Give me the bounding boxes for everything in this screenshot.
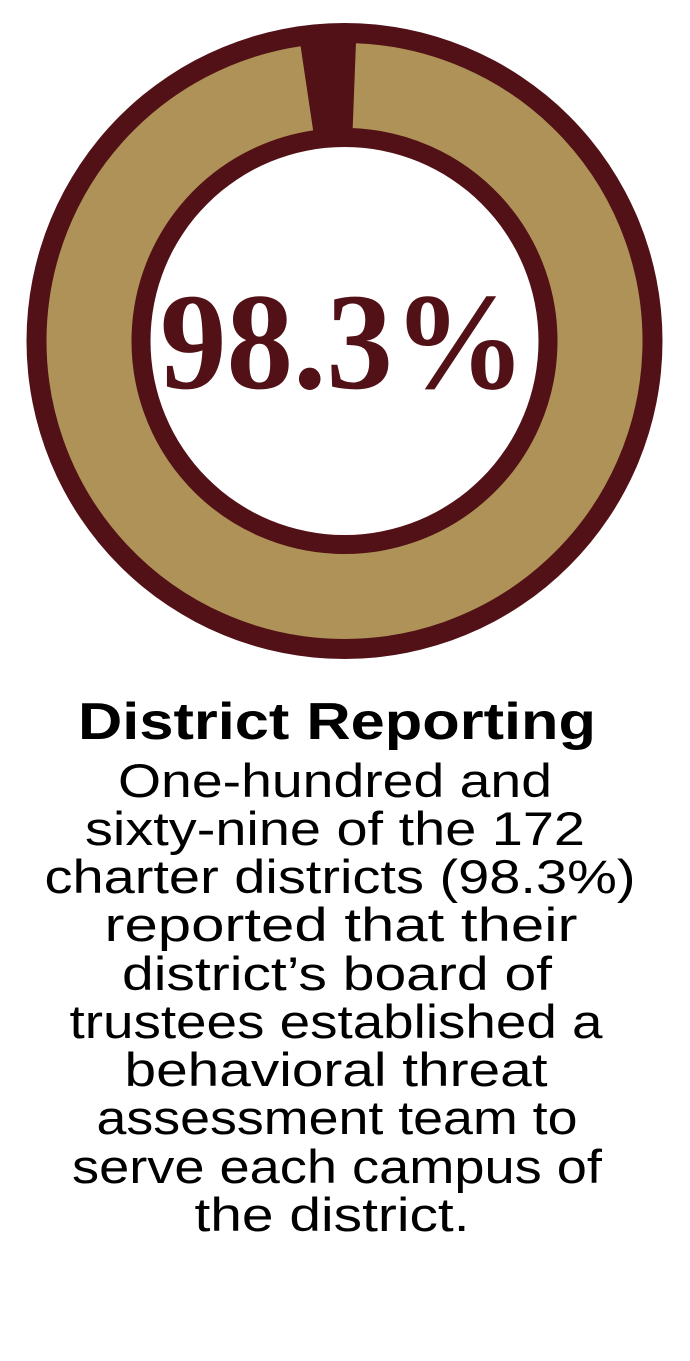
body text: charter districts (98.3%) bbox=[44, 850, 636, 903]
body text: the district. bbox=[194, 1188, 470, 1241]
body text: assessment team to bbox=[96, 1091, 578, 1144]
donut chart bbox=[26, 23, 662, 659]
percentage label: 98.3% bbox=[160, 265, 526, 418]
body text: trustees established a bbox=[70, 995, 604, 1048]
body text: behavioral threat bbox=[124, 1043, 548, 1096]
body text: reported that their bbox=[104, 898, 578, 951]
body text bbox=[44, 754, 636, 1241]
body text: district’s board of bbox=[122, 947, 553, 1000]
body text: serve each campus of bbox=[72, 1140, 603, 1193]
body text: sixty-nine of the 172 bbox=[85, 802, 585, 855]
body text: One-hundred and bbox=[118, 754, 552, 807]
heading: District Reporting bbox=[78, 693, 596, 751]
